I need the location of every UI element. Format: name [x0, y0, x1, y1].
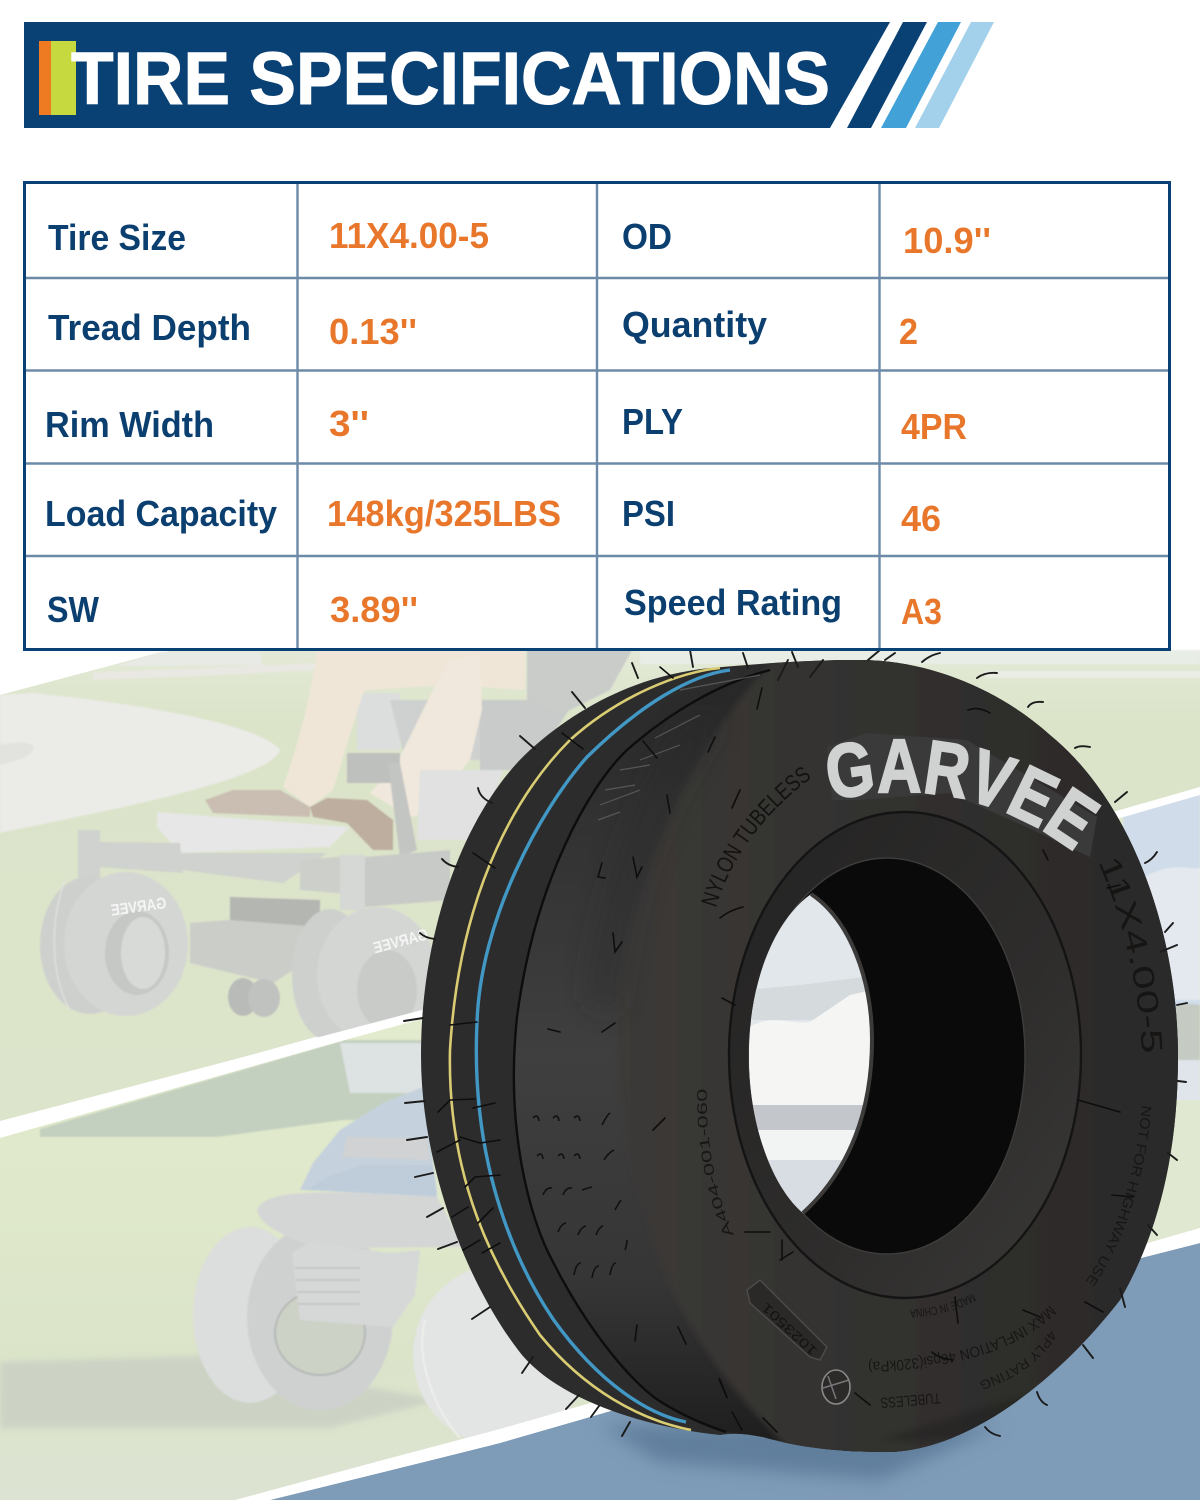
row: tread depth and quantity: 2 — [899, 311, 918, 352]
DOT mark — [822, 1370, 850, 1404]
accent bars — [39, 41, 76, 115]
GARVEE brand lettering: GARVEE — [827, 738, 1102, 852]
yellow tread stripe — [450, 668, 720, 1430]
frame — [177, 853, 327, 883]
blue tread stripe — [476, 670, 730, 1422]
row: rim width and PLY: 4PR — [901, 406, 967, 447]
row: load capacity and PSI: Load Capacity — [45, 493, 277, 534]
right mower tire — [292, 909, 368, 1041]
sidewall text: nylon tubeless: NYLON TUBELESS — [702, 767, 810, 906]
second mower tire — [413, 1265, 587, 1445]
row: tire size and OD: OD — [622, 216, 672, 257]
seam lines — [514, 670, 770, 1432]
inner wall edge — [803, 894, 872, 1213]
sidewall text: highway notice: NOT FOR HIGHWAY USE — [1086, 1106, 1152, 1286]
GARVEE label patch — [827, 733, 1097, 857]
row: tread depth and quantity: 0.13'' — [329, 311, 417, 352]
row: SW and speed rating: SW — [47, 589, 99, 630]
interior rubber vent spews — [437, 667, 1133, 1432]
row: load capacity and PSI — [45, 493, 941, 539]
sidewall text: code: A404-001-060 — [697, 1090, 734, 1235]
sidewall text: size: 11X4.00-5 — [1100, 859, 1162, 1052]
axle post and bracket — [340, 855, 365, 910]
grille — [292, 1242, 420, 1327]
outer rubber vent spews — [404, 650, 1187, 1436]
row: tire size and OD: 10.9'' — [903, 220, 991, 261]
sidewall text: tubeless: TUBELESS — [881, 1393, 940, 1408]
tread dimple marks — [533, 1113, 627, 1278]
tire silhouette — [421, 660, 1178, 1452]
row: tread depth and quantity: Tread Depth — [48, 307, 251, 348]
row: tread depth and quantity: Quantity — [622, 304, 767, 345]
title: TIRE SPECIFICATIONS — [71, 37, 830, 120]
front mower tire — [193, 1227, 307, 1403]
mower deck — [190, 910, 333, 983]
row: load capacity and PSI: 46 — [901, 498, 941, 539]
row: rim width and PLY: 3'' — [329, 403, 369, 444]
distant shrubs and path — [117, 652, 262, 666]
see-through view — [749, 894, 870, 1213]
tire opening — [749, 858, 1025, 1254]
row: SW and speed rating: A3 — [901, 591, 942, 632]
tread shoulder and sidewall shading — [514, 640, 1200, 1470]
operator trousers — [283, 650, 525, 807]
sidewall text: inflation rating: MAX INFLATION 46psi(320kPa) — [869, 1306, 1056, 1372]
bumper — [257, 1192, 463, 1248]
sidewall text: ply rating: 4PLY RATING — [980, 1332, 1055, 1389]
tire ground shadow — [600, 1425, 1000, 1480]
row: rim width and PLY — [45, 401, 967, 447]
row: tread depth and quantity — [48, 304, 918, 352]
background photo: zero-turn mower on lawn — [0, 650, 1200, 1125]
sky behind tire on right — [1123, 793, 1200, 1100]
white diagonal band lower — [235, 1228, 1200, 1500]
row: load capacity and PSI: 148kg/325LBS — [327, 493, 561, 534]
banner slanted stripes — [847, 22, 994, 128]
row: SW and speed rating: Speed Rating — [624, 582, 842, 623]
row: tire size and OD: Tire Size — [48, 217, 186, 258]
foot plate — [157, 812, 350, 853]
mower controls — [347, 753, 400, 783]
hood windshield — [300, 1087, 437, 1193]
row: rim width and PLY: Rim Width — [45, 404, 214, 445]
row: SW and speed rating: 3.89'' — [330, 589, 418, 630]
date code plate — [747, 1280, 827, 1360]
tire product image — [403, 651, 1188, 1452]
rim outer ring — [729, 812, 1081, 1298]
mirrored GARVEE lettering on mower tires: GARVEE — [371, 926, 430, 957]
mirrored GARVEE lettering on mower tires — [109, 895, 430, 957]
operator boots — [205, 790, 310, 817]
scuff marks — [598, 675, 760, 820]
blue ground panel — [270, 1243, 1200, 1500]
row: rim width and PLY: PLY — [622, 401, 683, 442]
white diagonal band upper — [0, 787, 1200, 1138]
left mower tire — [40, 876, 140, 1014]
title banner — [24, 22, 994, 128]
specifications table — [24, 182, 1170, 650]
seat back — [357, 693, 400, 750]
date code plate: 1023501 — [759, 1300, 820, 1359]
banner background — [24, 22, 890, 128]
driveway curve — [0, 693, 280, 833]
sidewall text: origin: MADE IN CHINA — [910, 1294, 976, 1318]
row: load capacity and PSI: PSI — [622, 493, 675, 534]
row: tire size and OD — [48, 215, 991, 261]
ground shadow — [0, 1356, 440, 1428]
background photo: riding mower on golf green — [0, 790, 1200, 1500]
front arm — [78, 830, 183, 877]
row: tire size and OD: 11X4.00-5 — [329, 215, 489, 256]
mirrored GARVEE lettering on mower tires: GARVEE — [109, 895, 168, 920]
row: SW and speed rating — [47, 582, 942, 632]
tree line — [40, 1040, 440, 1137]
